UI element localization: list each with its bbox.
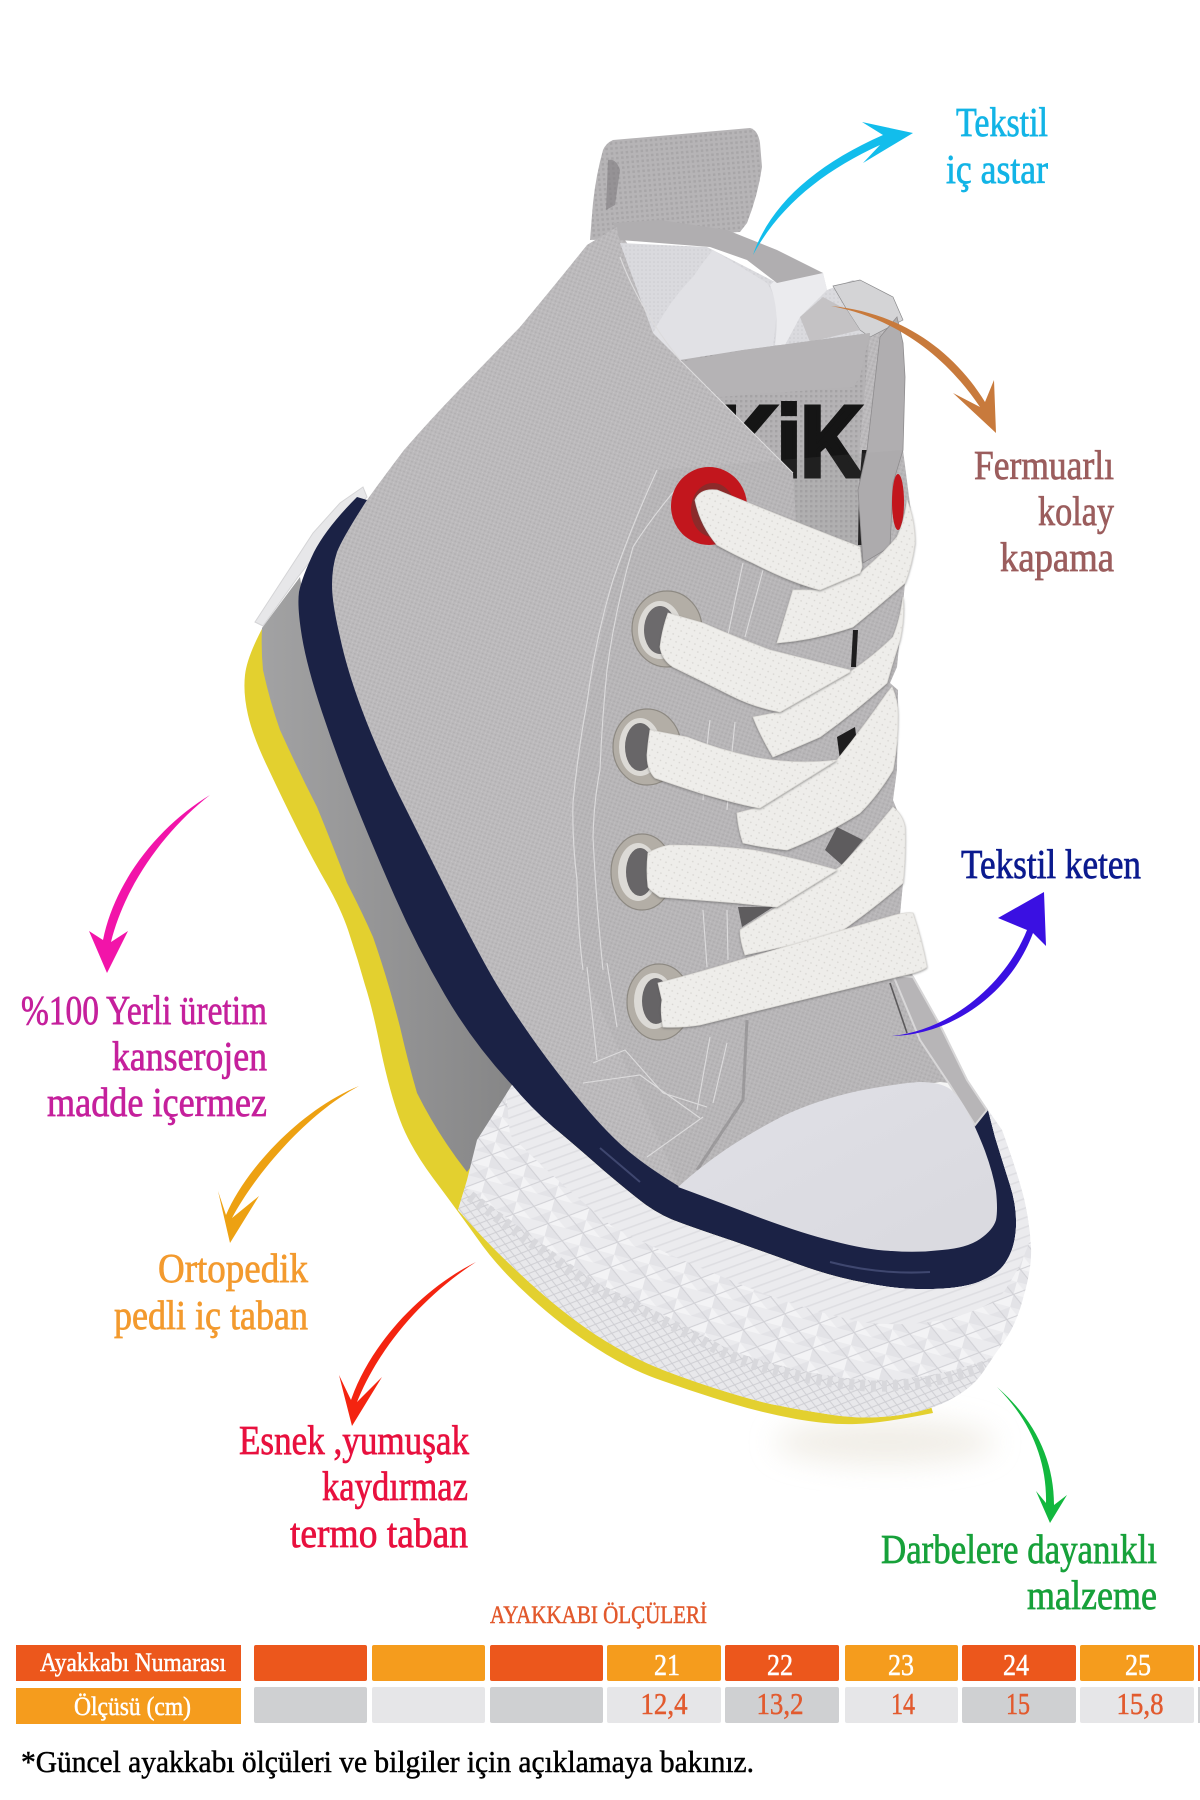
lower seam shading [697,1020,747,1170]
label: %100 Yerli üretim [21,987,267,1125]
eyelet: red right [892,474,904,530]
bumper lower fine texture [458,1188,992,1418]
measurement row: 14 [891,1686,915,1721]
lining puff [653,250,777,365]
inner lining [620,243,903,365]
label: Esnek yumuşak kaydırmaz termo taban [239,1417,469,1556]
darker twill shading [573,450,980,1187]
bumper rib band [505,1080,1040,1324]
size number row: 25 [1125,1647,1151,1682]
size number row: 24 [1003,1647,1029,1682]
grey rubber midsole [262,577,520,1172]
measurement row: 13,2 [756,1686,804,1721]
row header: Ayakkabı Numarası: Ayakkabı Numarası [40,1648,226,1677]
tongue rib band [680,333,870,397]
arrow: brown to zipper label [831,306,996,433]
navy welt stripe [298,497,1016,1289]
label: %100 Yerli üretim: %100 Yerli üretim [21,987,267,1033]
measurement row: 15 [1006,1686,1030,1721]
lace gap shadows [837,630,858,760]
label: Fermuarlı kolay kapama [974,442,1114,580]
measurement row: 15,8 [1116,1686,1164,1721]
label: Darbelere dayanıklı malzeme: malzeme [1027,1572,1157,1618]
label: Darbelere dayanıklı malzeme [881,1526,1157,1618]
measurement row [254,1686,1200,1723]
loop inner shadow [606,160,620,210]
yellow outsole [244,627,933,1424]
heel pull loop [590,128,762,240]
white heel tab [255,487,367,626]
white laces [647,490,927,1027]
label: Tekstil keten: Tekstil keten [961,841,1141,887]
label: Tekstil iç astar [946,99,1048,192]
eyelet: metal 4 [627,964,691,1040]
eyelet: metal 3 [611,834,673,910]
right foxing flap [893,975,987,1125]
label: %100 Yerli üretim: madde içermez [47,1079,267,1125]
label: Esnek yumuşak kaydırmaz termo taban: Esnek ,yumuşak [239,1417,469,1463]
arrow: magenta to origin label [89,795,210,973]
tongue logo: KiK [716,386,862,498]
row header: Ölçüsü [16,1688,241,1724]
measurement row: 12,4 [640,1686,688,1721]
white rope edge [770,267,827,345]
label: Ortopedik pedli iç taban [114,1245,308,1338]
arrow: blue to canvas label [892,892,1046,1036]
collar band [613,220,823,283]
dark flap gap [858,450,869,545]
canvas upper [332,227,987,1187]
dark edge line [890,983,907,1033]
zipper metal [833,280,903,337]
eyelet: metal 2 [613,709,681,785]
tongue [680,333,870,590]
navy stripe highlights [600,1148,930,1273]
label: Fermuarlı kolay kapama: kolay [1038,488,1114,534]
label: Ortopedik pedli iç taban: Ortopedik [158,1245,308,1291]
size number row [254,1645,1200,1682]
size number row: 22 [767,1647,793,1682]
eyelet: red [671,467,747,545]
label: Ortopedik pedli iç taban: pedli iç taban [114,1292,308,1338]
footnote: *Güncel ayakkabı ölçüleri ve bilgiler için açıklamaya bakınız. [21,1744,754,1779]
right flap [858,317,905,563]
stitching [573,257,793,1157]
tongue gap shading [738,827,863,927]
label: %100 Yerli üretim: kanserojen [112,1033,267,1079]
label: Tekstil iç astar: Tekstil [956,99,1048,145]
label: Darbelere dayanıklı malzeme: Darbelere dayanıklı [881,1526,1157,1572]
label: Esnek yumuşak kaydırmaz termo taban: termo taban [290,1510,468,1556]
table title: AYAKKABI ÖLÇÜLERİ [490,1602,707,1629]
zipper pull [800,297,860,342]
label: Fermuarlı kolay kapama: kapama [1000,534,1114,580]
size table [16,1645,1200,1724]
label: Tekstil iç astar: iç astar [946,146,1048,192]
ground shadow [775,1420,995,1464]
toe cap [678,1082,997,1252]
bumper dashed band [470,1196,993,1386]
arrow: green to material label [997,1387,1067,1523]
white toe bumper [458,1085,1031,1418]
label: Fermuarlı kolay kapama: Fermuarlı [974,442,1114,488]
size number row: 23 [888,1647,914,1682]
shoe photo illustration [244,128,1050,1464]
eyelet: metal 1 [632,591,702,667]
label: Esnek yumuşak kaydırmaz termo taban: kaydırmaz [322,1463,468,1509]
size number row: 21 [654,1647,680,1682]
front panel over logo [575,227,800,600]
arrow: red to sole label [339,1262,476,1426]
row header: Ölçüsü: Ölçüsü (cm) [74,1692,191,1721]
arrow: cyan to lining label [753,122,913,255]
arrow: orange to insole label [218,1086,359,1243]
